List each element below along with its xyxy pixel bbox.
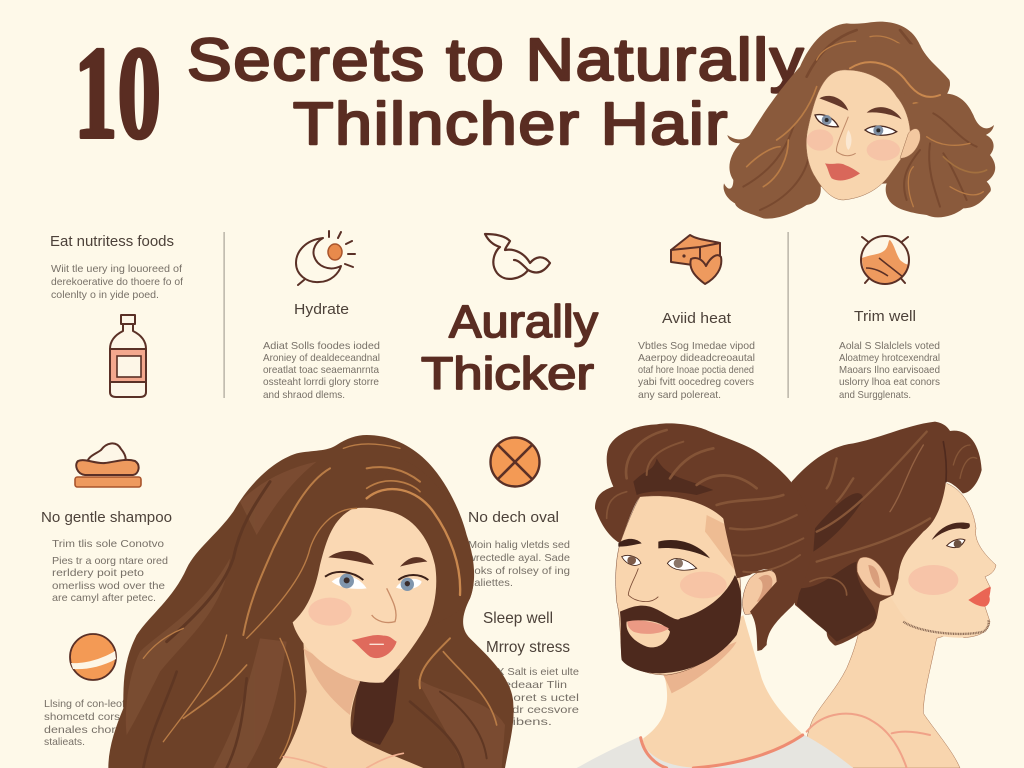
body text: Trim tlis sole Conotvo <box>52 538 164 550</box>
icon: moon and sun <box>296 231 355 285</box>
body text: Adiat Solls foodes ioded <box>263 340 380 352</box>
face <box>806 70 910 200</box>
heading: Trim well <box>854 308 916 325</box>
man: t-shirt <box>577 734 853 768</box>
man: blush <box>680 572 727 598</box>
man: beard <box>620 575 741 673</box>
hair strands <box>143 444 497 768</box>
body text: spibens. <box>497 716 552 728</box>
body text <box>839 340 940 401</box>
title line 2: Thilncher Hair <box>293 91 729 157</box>
body text lower <box>44 698 125 748</box>
portrait: woman with long wavy hair <box>108 435 514 768</box>
body text: Maoars Ilno earvisoaed <box>839 364 940 376</box>
face <box>293 508 436 683</box>
eyes <box>325 572 428 591</box>
man: eyebrows <box>618 539 642 547</box>
hair sweep over forehead <box>847 40 950 104</box>
body text: Vbtles Sog Imedae vipod <box>638 340 755 352</box>
strap lines <box>283 753 403 768</box>
man: nose <box>628 568 658 602</box>
profile figure: strap lines <box>807 714 930 768</box>
body text <box>51 263 183 301</box>
body text: Aloatmey hrotcexendral <box>839 352 940 364</box>
lips <box>825 163 860 180</box>
profile hair highlights <box>810 432 977 595</box>
heading: No gentle shampoo <box>41 509 172 526</box>
body text lower: Llsing of con-leof <box>44 698 125 710</box>
eyes and brows <box>815 96 902 135</box>
icon: bottle <box>110 315 146 397</box>
heading line 2: Thicker <box>421 348 594 399</box>
icon: orange ball <box>70 634 116 680</box>
man: collar <box>641 735 803 768</box>
body text: X Salt is eiet ulte <box>497 666 579 678</box>
heading: Hydrate <box>294 301 349 318</box>
title <box>74 19 805 166</box>
body text: are camyl after petec. <box>52 592 156 604</box>
body text: any sard polereat. <box>638 389 721 401</box>
body text lower: shomcetd cors <box>44 711 120 723</box>
big number 10: 10 <box>74 19 161 166</box>
body text: Pies tr a oorg ntare ored <box>52 555 168 567</box>
body text: Aaerpoy dideadcreoautal <box>638 352 755 364</box>
body text: Moin halig vletds sed <box>468 539 570 551</box>
body text lower: denales chort <box>44 724 119 736</box>
body text: mrdr cecsvore <box>497 704 579 716</box>
icon: box and heart <box>671 235 721 284</box>
portrait: man and profile figure back to back <box>577 422 996 768</box>
divider <box>788 232 789 398</box>
icon: crossed orange circle <box>490 438 540 486</box>
panel: hydrate <box>263 231 380 401</box>
ear <box>900 129 920 158</box>
man: hair <box>595 423 812 651</box>
profile figure: face <box>870 483 996 638</box>
lips <box>352 635 397 658</box>
body text: derekoerative do thoere fo of <box>51 276 183 288</box>
dark hair behind neck <box>350 668 400 745</box>
icon: bird <box>485 234 550 279</box>
hair mass <box>108 435 514 768</box>
body text: uslorry lhoa eat conors <box>839 376 940 388</box>
body text: and shraod dlems. <box>263 389 345 401</box>
hair over right of face <box>360 458 473 628</box>
eyebrows <box>328 551 374 565</box>
heading: Aviid heat <box>662 310 732 327</box>
body text: and Surgglenats. <box>839 389 911 401</box>
body text: Wiit tle uery ing louoreed of <box>51 263 182 275</box>
panel: no gentle shampoo <box>41 443 172 748</box>
body text <box>638 340 755 401</box>
man: face <box>616 496 741 675</box>
body text: ualiettes. <box>468 577 513 589</box>
body text: Aroniey of dealdeceandnal <box>263 352 380 364</box>
body text <box>467 539 570 589</box>
profile figure: face outline <box>947 483 996 638</box>
panel: eat nutritious foods <box>50 233 183 397</box>
body text: Aolal S Slalclels voted <box>839 340 940 352</box>
body text: omerliss wod over the <box>52 580 165 592</box>
panel: centre heading <box>421 234 599 399</box>
body text: lly oret s uctel <box>497 692 579 704</box>
profile figure: blush <box>908 565 958 595</box>
profile lips <box>968 587 991 607</box>
body text: colenlty o in yide poed. <box>51 289 159 301</box>
blush <box>308 598 352 626</box>
body text: oreatlat toac seaemanrnta <box>263 364 379 376</box>
body text: wrectedle ayal. Sade <box>467 552 570 564</box>
nose <box>836 117 856 156</box>
heading: No dech oval <box>468 509 559 526</box>
hair shadow and strands <box>743 30 987 210</box>
body text: ossteaht lorrdi glory storre <box>263 376 379 388</box>
body text <box>497 666 579 728</box>
body text <box>52 538 168 604</box>
profile figure: stubble <box>903 620 989 634</box>
icon: soap bar with foam <box>75 443 141 487</box>
hair highlights <box>126 462 505 768</box>
body text <box>263 340 380 401</box>
cheek blush <box>807 129 833 151</box>
man: lips <box>627 620 669 634</box>
profile ear <box>857 557 892 596</box>
heading line 1: Aurally <box>449 296 599 347</box>
body text: oedeaar Tlin <box>497 679 567 691</box>
man: hair highlights <box>607 430 803 572</box>
divider <box>224 232 225 398</box>
body text: goks of rolsey of ing <box>468 565 570 577</box>
panel: trim well <box>839 236 940 401</box>
title line 1: Secrets to Naturally <box>187 27 805 93</box>
panel: no dech oval, sleep well, manage stress <box>467 438 579 728</box>
neck and chest <box>277 642 423 768</box>
body text: rerldery poit peto <box>52 567 144 579</box>
panel: avoid heat <box>638 235 755 401</box>
portrait: woman with curly bob <box>724 22 995 219</box>
profile eye and brow <box>932 522 970 548</box>
heading: sleep well: Sleep well <box>483 610 553 627</box>
man: ear <box>743 570 778 614</box>
nose <box>372 588 396 623</box>
man: neck <box>640 615 803 768</box>
heading: manage stress: Mrroy stress <box>486 639 570 656</box>
heading: Eat nutritess foods <box>50 233 174 250</box>
icon: crossed circle with wave <box>861 236 909 284</box>
body text: yabi fvitt oocedreg covers <box>638 376 754 388</box>
man: eyes <box>622 555 697 570</box>
hair mass: profile figure <box>783 422 982 646</box>
body text: otaf hore Inoae poctia dened <box>638 364 754 376</box>
body text lower: stalieats. <box>44 736 85 748</box>
profile figure: neck and chest <box>803 582 970 768</box>
